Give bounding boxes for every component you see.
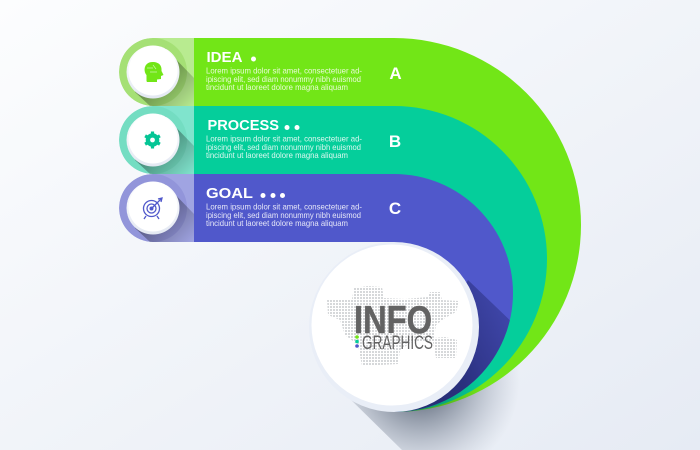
connector: goal lighter tab <box>153 174 194 242</box>
body: process: ipiscing elit, sed diam nonummy nibh euismod <box>206 142 361 152</box>
body: idea: ipiscing elit, sed diam nonummy nibh euismod <box>206 74 361 84</box>
body: idea <box>206 66 362 92</box>
body: goal: ipiscing elit, sed diam nonummy nibh euismod <box>206 210 361 220</box>
central circle <box>309 242 479 412</box>
body: idea: tincidunt ut laoreet dolore magna aliquam <box>206 82 348 92</box>
world map dots <box>327 286 459 366</box>
body: process: Lorem ipsum dolor sit amet, consectetuer ad- <box>206 134 362 144</box>
letter B: B <box>389 132 401 151</box>
heading dots: idea <box>251 56 256 62</box>
icon disc: process <box>126 114 180 166</box>
heading dots: process <box>284 125 300 130</box>
ring: goal <box>119 174 187 242</box>
body: goal <box>206 202 362 228</box>
heading: idea: IDEA <box>206 50 243 66</box>
icon: brain head <box>145 62 164 82</box>
heading: process: PROCESS <box>208 118 279 134</box>
cast shadow of main shape <box>345 345 550 450</box>
shadow on bands below center circle <box>396 382 478 412</box>
body: goal: Lorem ipsum dolor sit amet, consectetuer ad- <box>206 202 362 212</box>
heading dots: goal <box>260 193 285 198</box>
text: process <box>206 118 401 160</box>
letter C: C <box>389 199 401 218</box>
ring: idea <box>119 38 187 106</box>
icon: gear <box>145 132 160 148</box>
panel: idea band A <box>119 38 581 412</box>
icon disc: goal <box>126 182 180 234</box>
text: idea <box>206 50 402 92</box>
shadow: idea circle <box>135 48 194 106</box>
body: process: tincidunt ut laoreet dolore magna aliquam <box>206 150 348 160</box>
body: process <box>206 134 362 160</box>
panel: goal band C <box>119 174 513 412</box>
letter A: A <box>389 64 402 83</box>
logo dots <box>355 335 359 348</box>
heading: goal: GOAL <box>206 186 253 202</box>
connector: idea lighter tab <box>153 38 194 106</box>
body: idea: Lorem ipsum dolor sit amet, consectetuer ad- <box>206 66 362 76</box>
shadow: goal circle <box>135 184 194 242</box>
body: goal: tincidunt ut laoreet dolore magna aliquam <box>206 218 348 228</box>
icon disc: idea <box>126 46 180 98</box>
shadow on blue band <box>413 280 510 410</box>
logo text INFO: INFO <box>354 299 432 342</box>
panel: process band B <box>119 106 547 412</box>
connector: process lighter tab <box>153 106 194 174</box>
logo text GRAPHICS: GRAPHICS <box>362 333 433 354</box>
text: goal <box>206 186 401 228</box>
ring: process <box>119 106 187 174</box>
shadow: process circle <box>135 116 194 174</box>
icon: target <box>144 198 162 219</box>
